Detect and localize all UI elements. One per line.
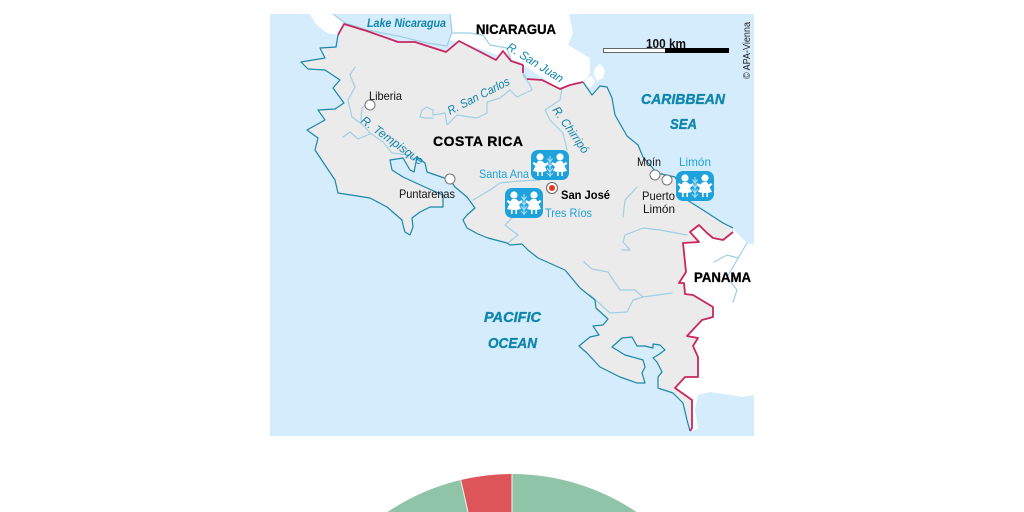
label: R. San Carlos: R. San Carlos xyxy=(445,74,512,118)
SOS site: Santa Ana: Santa Ana xyxy=(479,167,529,181)
city: Puntarenas: Puntarenas xyxy=(399,187,455,201)
label: Pacific Ocean: PACIFIC xyxy=(484,309,542,326)
pie slice: green right xyxy=(512,474,636,512)
Panama land xyxy=(675,225,754,431)
city: Liberia xyxy=(365,89,402,110)
pie slice: red xyxy=(461,474,512,512)
border: Costa Rica / Panama xyxy=(675,225,733,431)
label: NICARAGUA: NICARAGUA xyxy=(476,21,556,37)
SOS site: Tres Ríos xyxy=(505,188,592,220)
pie slice: green left xyxy=(388,480,468,512)
city: Puerto Limón xyxy=(642,175,675,216)
Costa Rica land xyxy=(301,24,733,431)
scale bar xyxy=(604,36,729,53)
label: Caribbean Sea xyxy=(641,91,726,133)
label: Caribbean Sea: SEA xyxy=(670,116,697,133)
SOS site: Limón: Limón xyxy=(679,155,711,169)
border: Costa Rica / Nicaragua xyxy=(338,24,583,89)
city: San José xyxy=(546,182,610,202)
label: PANAMA: PANAMA xyxy=(694,269,751,285)
label: Lake Nicaragua: Lake Nicaragua xyxy=(367,16,446,30)
pie chart (cropped) xyxy=(388,474,636,512)
label: R. Tempisque: R. Tempisque xyxy=(358,113,427,168)
city: San José: San José xyxy=(561,188,610,202)
label: Pacific Ocean: OCEAN xyxy=(488,335,538,352)
sea background xyxy=(270,14,754,436)
coastline xyxy=(301,35,733,431)
map panel xyxy=(270,14,754,436)
Nicaragua land xyxy=(310,14,590,89)
city: Moín xyxy=(637,155,661,180)
label: COSTA RICA: COSTA RICA xyxy=(433,133,523,149)
scale bar: 100 km xyxy=(646,36,686,51)
SOS site: Limón xyxy=(676,155,714,201)
label: Pacific Ocean xyxy=(484,309,542,352)
label: Caribbean Sea: CARIBBEAN xyxy=(641,91,726,108)
city: Moín: Moín xyxy=(637,155,661,169)
label: R. San Juan: R. San Juan xyxy=(504,40,566,86)
rivers xyxy=(333,14,747,313)
SOS site: Santa Ana xyxy=(479,150,569,181)
islands near Rio San Juan xyxy=(584,64,605,88)
city: Liberia: Liberia xyxy=(369,89,402,103)
city: Puerto Limón: Puerto xyxy=(642,189,675,203)
credit: © APA-Vienna xyxy=(742,22,753,79)
SOS site: Tres Ríos: Tres Ríos xyxy=(545,206,592,220)
Lake Nicaragua xyxy=(334,14,452,40)
city: Puntarenas xyxy=(399,174,455,201)
city: Puerto Limón: Limón xyxy=(643,202,675,216)
label: R. Chirripó: R. Chirripó xyxy=(550,104,592,156)
